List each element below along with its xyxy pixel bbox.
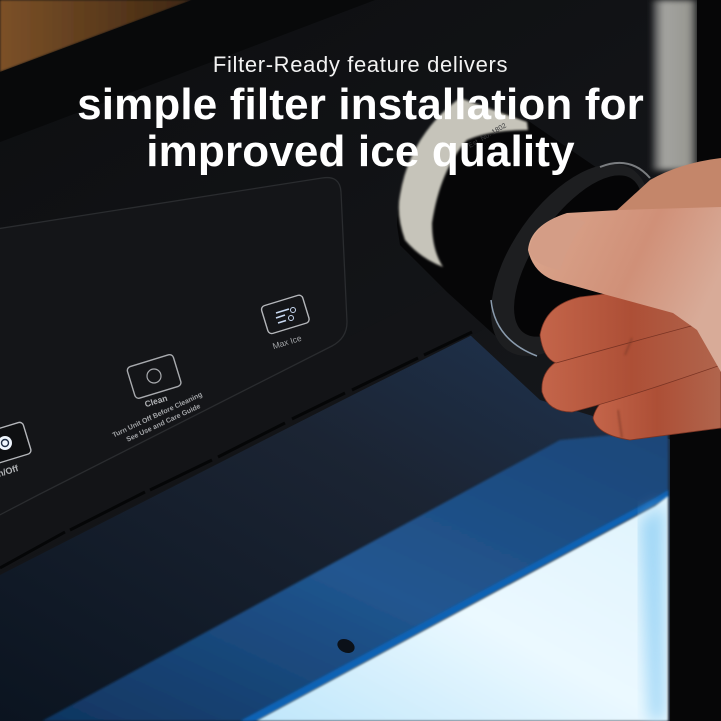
Clean button: See Use and Care Guide bbox=[125, 403, 202, 444]
water filter cartridge: Est. No. 1802 bbox=[468, 122, 508, 150]
main title bbox=[77, 80, 644, 176]
Clean button bbox=[112, 354, 204, 444]
filter cap ring bbox=[459, 137, 681, 383]
back of hand bbox=[615, 158, 721, 290]
main title: improved ice quality bbox=[146, 127, 575, 176]
ice bin side glow bbox=[640, 505, 664, 721]
thumb nail bbox=[529, 214, 585, 270]
door latch bbox=[335, 636, 357, 656]
lower navy compartment bbox=[0, 335, 672, 721]
subtitle: Filter-Ready feature delivers bbox=[213, 52, 508, 77]
upper finger bbox=[540, 280, 721, 363]
main title: simple filter installation for bbox=[77, 80, 644, 129]
wooden surface bbox=[0, 0, 192, 72]
thumb bbox=[528, 207, 721, 372]
lower frame bbox=[670, 425, 721, 721]
bright lip edge bbox=[240, 490, 668, 721]
blue door lip bbox=[42, 430, 668, 721]
top edge of appliance bbox=[0, 0, 375, 142]
hand bbox=[528, 158, 721, 440]
headline bbox=[77, 52, 644, 176]
finger creases bbox=[618, 338, 632, 438]
middle finger bbox=[542, 310, 721, 412]
Max Ice button: Max Ice bbox=[271, 333, 303, 351]
illuminated ice bin bbox=[256, 496, 668, 721]
Max Ice button bbox=[261, 294, 310, 351]
black side frame bbox=[697, 0, 721, 721]
Clean button: Turn Unit Off Before Cleaning bbox=[112, 391, 204, 439]
water filter cartridge bbox=[397, 98, 600, 340]
front panel strip bbox=[0, 275, 492, 572]
steel side trim bbox=[652, 0, 698, 170]
button seams bbox=[0, 332, 472, 568]
Clean button: Clean bbox=[143, 393, 169, 409]
lower finger bbox=[593, 340, 721, 440]
On/Off button bbox=[0, 421, 32, 479]
control panel outline bbox=[0, 178, 347, 520]
